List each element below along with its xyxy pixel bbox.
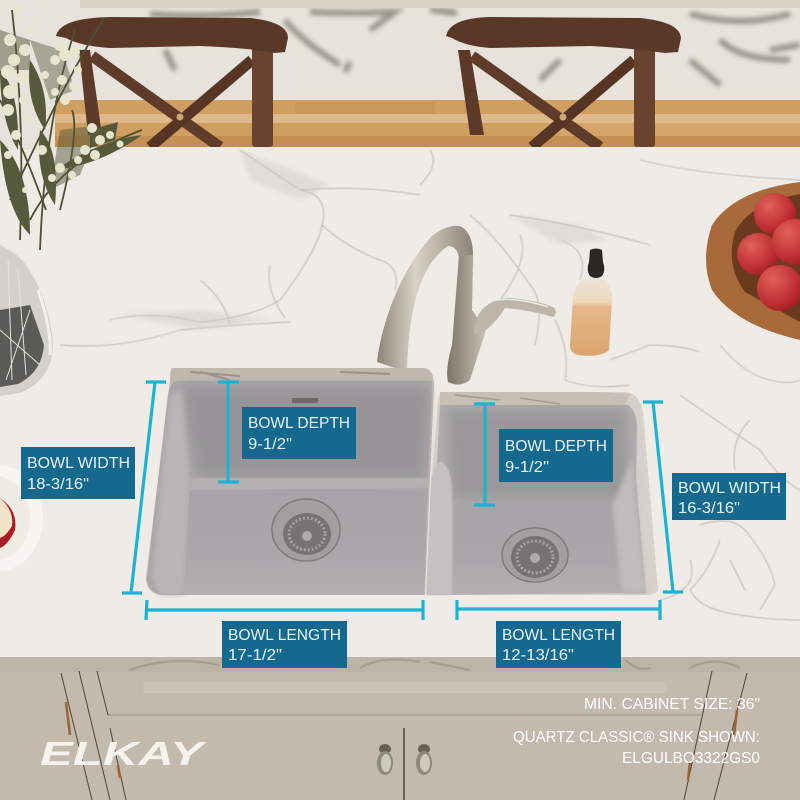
left chair (56, 17, 288, 147)
rug pattern (150, 10, 800, 85)
soap dispenser (570, 248, 612, 356)
right drain (502, 528, 568, 582)
label: left bowl width: 18-3/16" (27, 476, 89, 493)
label: left bowl width (21, 447, 135, 499)
counter edge veining (130, 660, 740, 670)
dimension: right bowl depth (474, 404, 495, 505)
dimension: right bowl length (457, 600, 660, 620)
sink (146, 368, 658, 595)
logo: Elkay: ELKAY (40, 735, 207, 772)
marble countertop (0, 147, 800, 657)
label: left bowl width: BOWL WIDTH (27, 455, 130, 472)
label: left bowl depth: 9-1/2" (248, 436, 292, 453)
faucet body (447, 255, 486, 385)
marble veining (60, 150, 800, 620)
label: right bowl width: BOWL WIDTH (678, 480, 781, 497)
plate with apple slice (0, 465, 43, 571)
left drain (272, 499, 340, 561)
apples (737, 193, 800, 311)
sink left bowl (146, 368, 434, 595)
dimension: right bowl width (643, 402, 683, 592)
sink right bowl (426, 392, 658, 595)
wood floor (55, 100, 800, 147)
label: left bowl depth (242, 407, 356, 459)
label: right bowl depth: 9-1/2" (505, 459, 549, 476)
label: left bowl length: 17-1/2" (228, 647, 282, 664)
door and panel lines (61, 671, 747, 800)
label: left bowl depth: BOWL DEPTH (248, 415, 350, 432)
plant with white blossoms (0, 5, 142, 250)
label: right bowl length (496, 621, 621, 668)
text: sink model shown: QUARTZ CLASSIC® SINK SHOWN: (513, 729, 760, 746)
vase (0, 245, 53, 396)
label: left bowl length (222, 621, 347, 668)
faucet handle (474, 298, 556, 335)
faucet (377, 226, 556, 385)
label: right bowl width (672, 473, 786, 520)
text: minimum cabinet size: MIN. CABINET SIZE: 36" (584, 696, 760, 713)
bowl of apples (706, 182, 800, 340)
dimension: left bowl length (146, 600, 423, 620)
spout (377, 226, 473, 372)
label: right bowl depth: BOWL DEPTH (505, 438, 607, 455)
left cabinet knob (377, 744, 393, 775)
label: right bowl length: 12-13/16" (502, 647, 574, 664)
label: right bowl width: 16-3/16" (678, 500, 740, 517)
bench top edge (80, 0, 800, 8)
background room behind the counter (0, 0, 800, 150)
label: right bowl length: BOWL LENGTH (502, 627, 615, 644)
right chair (446, 17, 681, 147)
text: sink model shown: ELGULBO3322GS0 (622, 750, 760, 767)
text: sink model shown (513, 729, 760, 767)
right cabinet knob (416, 744, 432, 775)
dimension: left bowl depth (218, 382, 239, 482)
label: left bowl length: BOWL LENGTH (228, 627, 341, 644)
label: right bowl depth (499, 429, 613, 482)
cabinet front below counter (0, 657, 800, 800)
dimension: left bowl width (122, 382, 166, 593)
